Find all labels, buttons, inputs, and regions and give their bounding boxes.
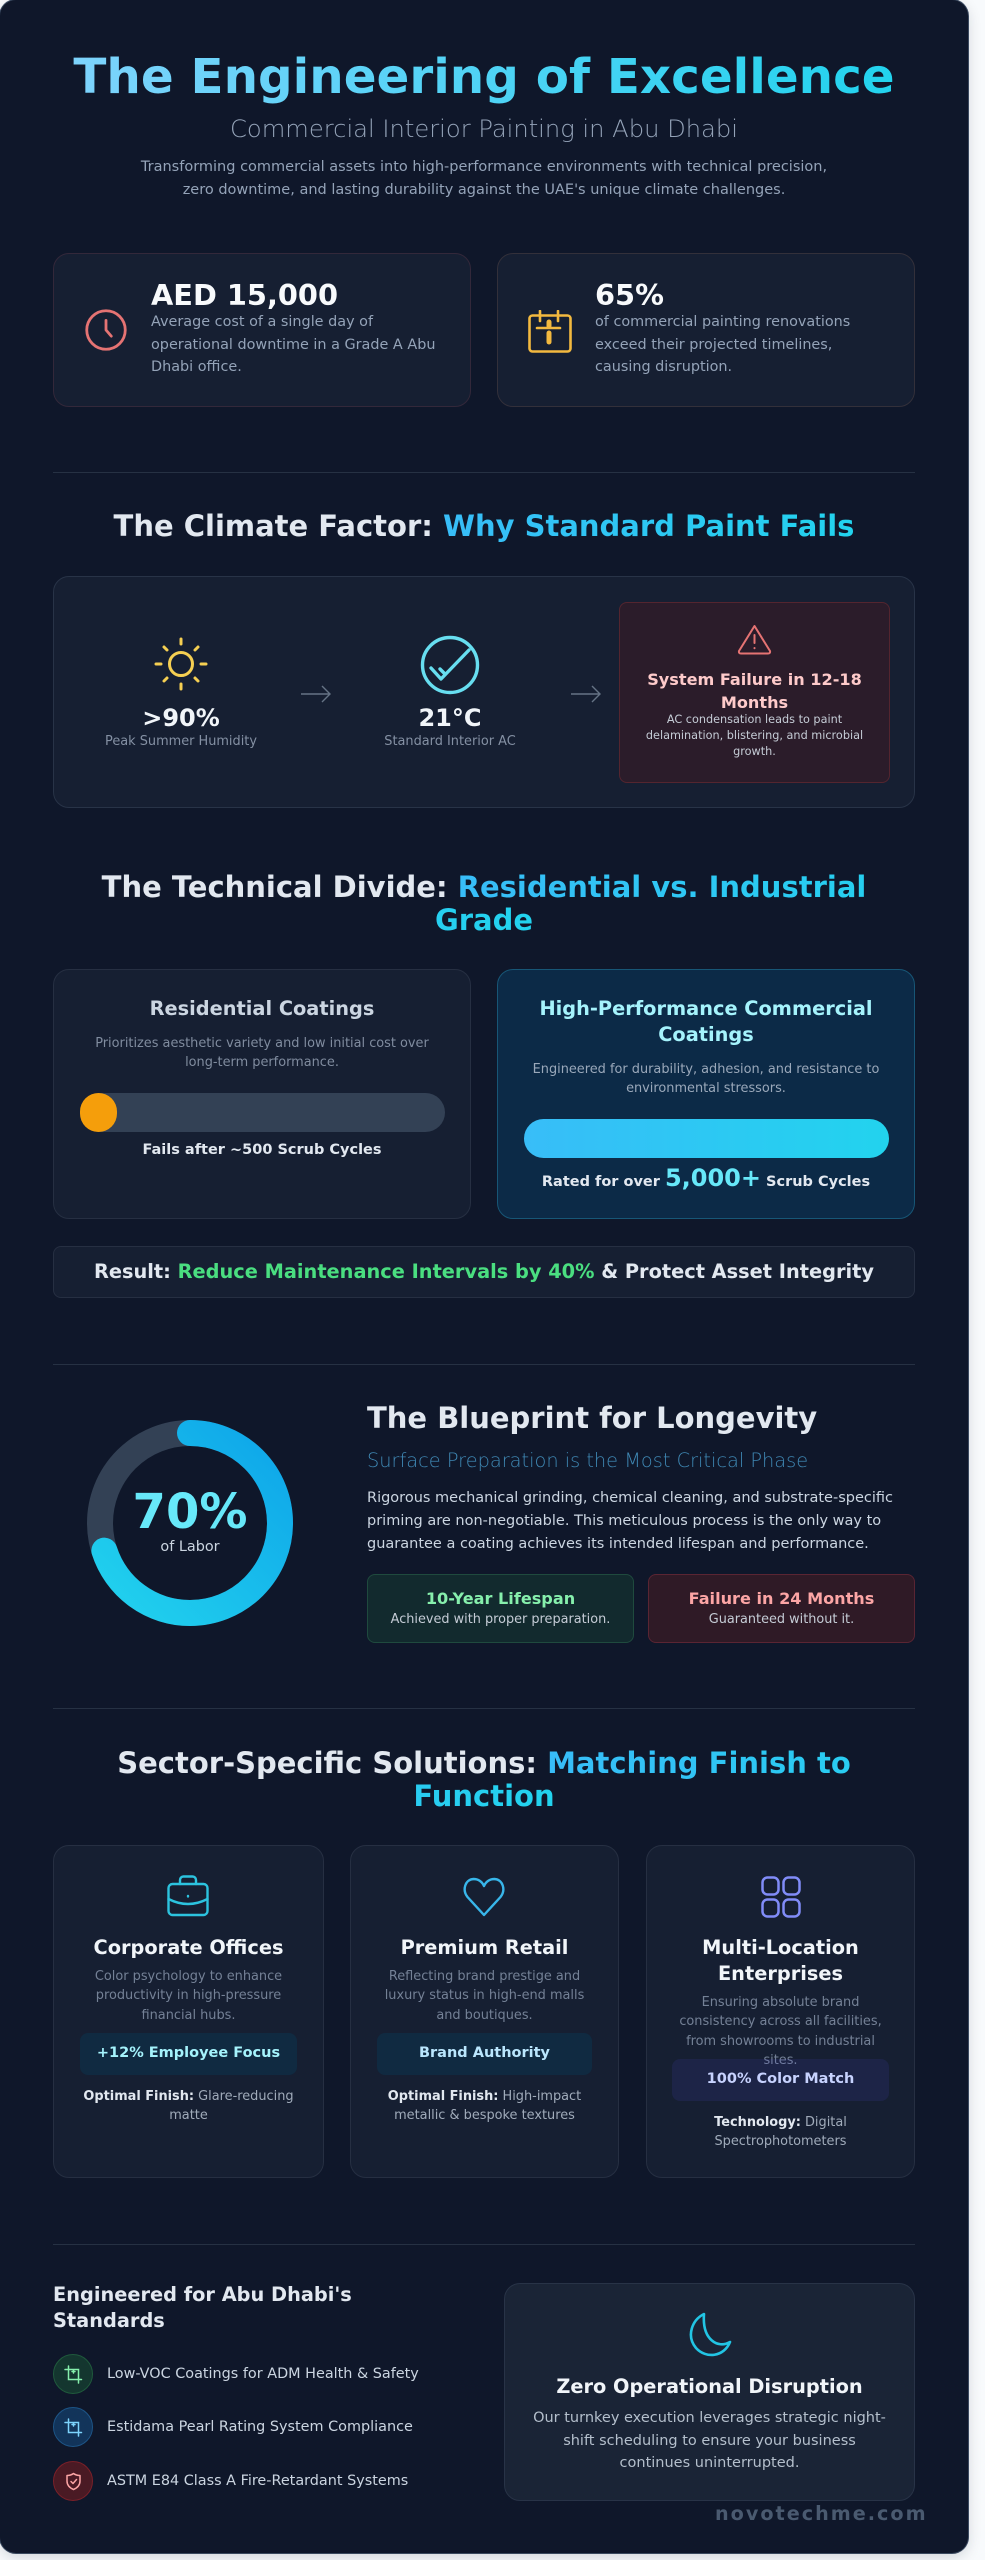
callout title: Failure in 24 Months bbox=[689, 1589, 874, 1608]
finish note: matte bbox=[169, 2108, 208, 2123]
panel text bbox=[533, 1062, 879, 1096]
label: humidity: Peak Summer Humidity bbox=[105, 734, 257, 749]
label: temperature: Standard Interior AC bbox=[384, 734, 516, 749]
stat description: operational downtime in a Grade A Abu bbox=[151, 337, 435, 353]
panel title: Residential Coatings bbox=[150, 997, 374, 1020]
stat description: causing disruption. bbox=[595, 359, 732, 375]
body text: priming are non-negotiable. This meticulous process is the only way to bbox=[367, 1513, 881, 1529]
subheading: Surface Preparation is the Most Critical Phase bbox=[367, 1449, 808, 1472]
item text: Estidama Pearl Rating System Compliance bbox=[107, 2419, 413, 2435]
stat description bbox=[151, 314, 435, 375]
result text: Result: Reduce Maintenance Intervals by 40% & Protect Asset Integrity bbox=[94, 1260, 874, 1283]
icon: clock bbox=[85, 309, 127, 351]
subtitle: Commercial Interior Painting in Abu Dhabi bbox=[230, 115, 738, 143]
callout text: delamination, blistering, and microbial bbox=[646, 729, 863, 742]
card text: Color psychology to enhance bbox=[95, 1969, 282, 1984]
card title: Corporate Offices bbox=[94, 1936, 283, 1959]
arrow bbox=[301, 686, 331, 702]
card title: Enterprises bbox=[718, 1962, 843, 1985]
panel text: environmental stressors. bbox=[626, 1081, 786, 1096]
finish note bbox=[388, 2089, 581, 2123]
panel text bbox=[95, 1036, 429, 1070]
donut value: 70% bbox=[133, 1484, 247, 1540]
card text bbox=[385, 1969, 584, 2023]
callout heading: Months bbox=[721, 693, 788, 712]
badge bbox=[672, 2059, 889, 2101]
panel text: Prioritizes aesthetic variety and low initial cost over bbox=[95, 1036, 429, 1051]
intro text bbox=[140, 159, 827, 198]
panel text: long-term performance. bbox=[185, 1055, 339, 1070]
stat card: timeline overruns bbox=[497, 253, 915, 407]
panel: corporate offices bbox=[53, 1845, 324, 2178]
heading: technical divide bbox=[102, 870, 866, 937]
panel: zero operational disruption bbox=[504, 2283, 915, 2501]
icon badge bbox=[53, 2407, 93, 2447]
donut label: of Labor bbox=[160, 1539, 220, 1555]
intro text: Transforming commercial assets into high-performance environments with technical precision, bbox=[141, 159, 827, 175]
stat value: AED 15,000 bbox=[151, 278, 338, 312]
card text bbox=[679, 1995, 882, 2068]
icon: moon bbox=[690, 2312, 732, 2356]
icon: check circle bbox=[420, 636, 480, 694]
icon: heart bbox=[463, 1878, 505, 1916]
bar label: Rated for over 5,000+ Scrub Cycles bbox=[542, 1164, 870, 1192]
card title bbox=[702, 1936, 859, 1985]
icon: warning bbox=[738, 625, 772, 654]
item text: Low-VOC Coatings for ADM Health & Safety bbox=[107, 2366, 419, 2382]
main title: The Engineering of Excellence bbox=[73, 49, 895, 105]
card text: Ensuring absolute brand bbox=[702, 1995, 859, 2010]
heading: technical divide: Grade bbox=[435, 903, 533, 937]
panel text: Our turnkey execution leverages strategic night- bbox=[533, 2410, 886, 2426]
panel text: continues uninterrupted. bbox=[620, 2455, 799, 2471]
panel: residential coatings bbox=[53, 969, 471, 1219]
callout text: Achieved with proper preparation. bbox=[391, 1612, 610, 1627]
callout: failure in 24 months bbox=[648, 1574, 915, 1643]
list item: ASTM bbox=[53, 2461, 408, 2501]
card title: Premium Retail bbox=[401, 1936, 568, 1959]
card text: luxury status in high-end malls bbox=[385, 1988, 584, 2003]
heading: blueprint: The Blueprint for Longevity bbox=[367, 1401, 817, 1435]
stat description: Average cost of a single day of bbox=[151, 314, 373, 330]
card title: Multi-Location bbox=[702, 1936, 859, 1959]
panel: multi-location enterprises bbox=[646, 1845, 915, 2178]
icon: sun bbox=[154, 638, 208, 690]
callout text: Guaranteed without it. bbox=[709, 1612, 854, 1627]
icon badge bbox=[53, 2354, 93, 2394]
icon: calendar bbox=[528, 310, 572, 353]
panel: premium retail bbox=[350, 1845, 619, 2178]
bar fill: 10% bbox=[80, 1093, 117, 1132]
heading: climate factor: The Climate Factor: Why Standard Paint Fails bbox=[114, 509, 854, 543]
technology note bbox=[714, 2115, 847, 2149]
panel title: Coatings bbox=[658, 1023, 754, 1046]
finish note: Optimal Finish: Glare-reducing bbox=[83, 2089, 294, 2104]
finish note: Optimal Finish: High-impact bbox=[388, 2089, 581, 2104]
stat value: 65% bbox=[595, 278, 664, 312]
card text: consistency across all facilities, bbox=[679, 2014, 882, 2029]
icon: briefcase bbox=[167, 1875, 209, 1916]
panel title: High-Performance Commercial bbox=[539, 997, 873, 1020]
heading: technical divide: The Technical Divide: Residential vs. Industrial bbox=[102, 870, 866, 904]
stat description bbox=[595, 314, 850, 375]
finish note bbox=[83, 2089, 294, 2123]
body text: guarantee a coating achieves its intended lifespan and performance. bbox=[367, 1536, 869, 1552]
card text: financial hubs. bbox=[142, 2008, 235, 2023]
card text: from showrooms to industrial bbox=[686, 2034, 875, 2049]
panel text: shift scheduling to ensure your business bbox=[563, 2433, 856, 2449]
heading: standards: Engineered for Abu Dhabi's bbox=[53, 2283, 352, 2306]
badge bbox=[377, 2033, 592, 2075]
badge bbox=[80, 2033, 297, 2075]
panel title: Zero Operational Disruption bbox=[556, 2375, 863, 2398]
stat description: exceed their projected timelines, bbox=[595, 337, 832, 353]
stat: humidity: >90% bbox=[142, 704, 220, 732]
callout: 10-year lifespan bbox=[367, 1574, 634, 1643]
bar: scrub cycles bbox=[524, 1119, 889, 1158]
item text: ASTM E84 Class A Fire-Retardant Systems bbox=[107, 2473, 408, 2489]
card text: Reflecting brand prestige and bbox=[389, 1969, 580, 1984]
badge: 100% Color Match bbox=[707, 2071, 854, 2087]
technology note: Technology: Digital bbox=[714, 2115, 847, 2130]
callout text: growth. bbox=[733, 745, 776, 758]
card text bbox=[95, 1969, 282, 2023]
panel title bbox=[539, 997, 873, 1046]
result banner bbox=[53, 1246, 915, 1298]
callout: system failure bbox=[619, 602, 890, 783]
callout text: AC condensation leads to paint bbox=[667, 713, 842, 726]
intro text: zero downtime, and lasting durability against the UAE's unique climate challenges. bbox=[183, 182, 785, 198]
stat description: Dhabi office. bbox=[151, 359, 242, 375]
stat card: downtime cost bbox=[53, 253, 471, 407]
card text: sites. bbox=[763, 2053, 798, 2068]
body text bbox=[367, 1490, 893, 1552]
finish note: metallic & bespoke textures bbox=[394, 2108, 575, 2123]
arrow bbox=[571, 686, 601, 702]
heading: standards: Standards bbox=[53, 2309, 165, 2332]
icon badge bbox=[53, 2461, 93, 2501]
badge: Brand Authority bbox=[419, 2045, 550, 2061]
panel: commercial coatings bbox=[497, 969, 915, 1219]
body text: Rigorous mechanical grinding, chemical cleaning, and substrate-specific bbox=[367, 1490, 893, 1506]
callout heading bbox=[647, 670, 862, 712]
card text: and boutiques. bbox=[436, 2008, 533, 2023]
heading: sector solutions bbox=[117, 1746, 851, 1813]
heading: sector solutions: Sector-Specific Solutions: Matching Finish to bbox=[117, 1746, 851, 1780]
bar track: scrub cycles bbox=[80, 1093, 445, 1132]
callout heading: System Failure in 12-18 bbox=[647, 670, 862, 689]
callout title: 10-Year Lifespan bbox=[426, 1589, 575, 1608]
watermark: novotechme.com bbox=[715, 2502, 928, 2525]
panel: climate chain bbox=[53, 576, 915, 808]
badge: +12% Employee Focus bbox=[97, 2045, 280, 2061]
icon: grid bbox=[761, 1876, 801, 1918]
bar label: Fails after ~500 Scrub Cycles bbox=[142, 1142, 382, 1158]
heading: standards bbox=[53, 2283, 352, 2332]
technology note: Spectrophotometers bbox=[714, 2134, 846, 2149]
list item: Estidama bbox=[53, 2407, 413, 2447]
list item: low-VOC bbox=[53, 2354, 419, 2394]
card text: productivity in high-pressure bbox=[96, 1988, 281, 2003]
donut chart: 70% of labor bbox=[87, 1420, 293, 1626]
stat: temperature: 21°C bbox=[418, 704, 482, 732]
heading: sector solutions: Function bbox=[413, 1779, 555, 1813]
panel text: Engineered for durability, adhesion, and resistance to bbox=[533, 1062, 879, 1077]
stat description: of commercial painting renovations bbox=[595, 314, 850, 330]
panel text bbox=[533, 2410, 886, 2471]
callout text bbox=[646, 713, 863, 758]
